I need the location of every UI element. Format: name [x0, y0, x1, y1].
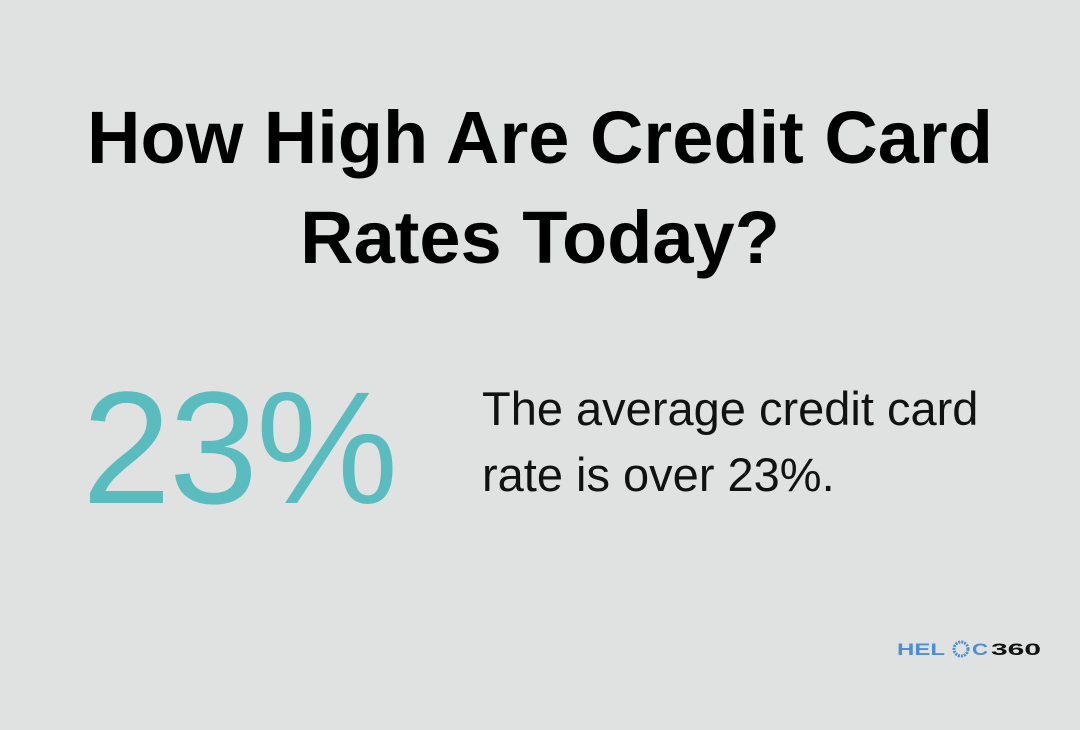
title — [87, 96, 993, 279]
logo: HELOC360 — [897, 640, 1041, 659]
logo: HELOC360: C — [972, 640, 988, 659]
description text: The average credit card — [482, 382, 978, 435]
title: How High Are Credit Card — [87, 96, 993, 179]
title: Rates Today? — [300, 196, 780, 279]
big stat: 23%: 23% — [82, 358, 396, 537]
logo: HELOC360: 360 — [991, 640, 1041, 659]
logo: HELOC360: HEL — [897, 640, 945, 659]
description text: rate is over 23%. — [482, 448, 835, 501]
description text — [482, 382, 978, 501]
